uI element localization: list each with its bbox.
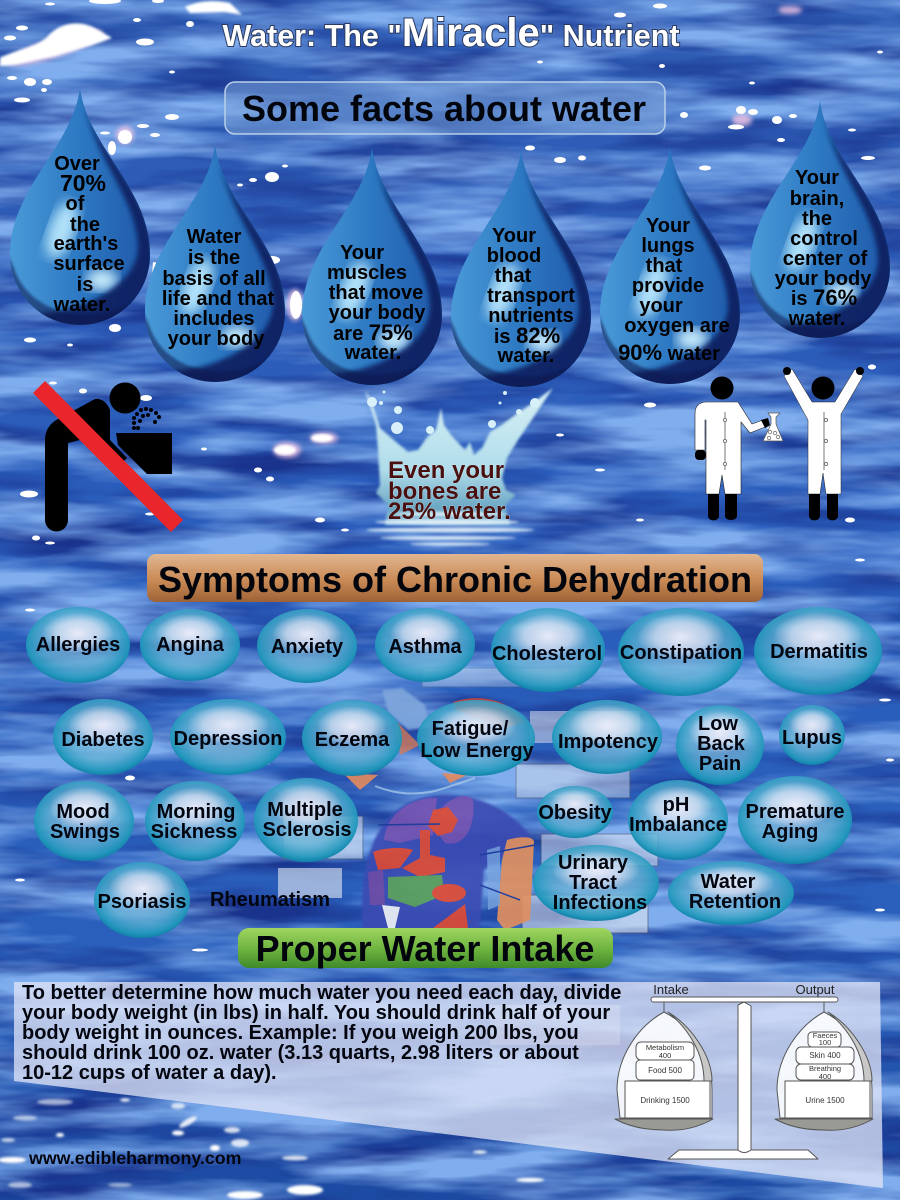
drop: blood 82%: Your	[492, 225, 536, 247]
drop: lungs 90%: provide	[632, 275, 704, 297]
bubble: Fatigue / Low Energy: Low Energy	[420, 740, 535, 762]
drop: 70% of earth's surface: Over	[54, 153, 100, 175]
right pan: output: 400	[819, 1072, 831, 1081]
drop: blood 82%: nutrients	[488, 305, 574, 327]
drop: blood 82%: transport	[487, 285, 575, 307]
bubble: Lupus	[779, 705, 845, 765]
bubble: Obesity	[537, 786, 613, 838]
left pan: intake	[615, 1002, 713, 1130]
bubble: Multiple Sclerosis	[254, 778, 358, 862]
bubble: Obesity: Obesity	[538, 802, 613, 824]
drop: 70% of earth's surface: water.	[53, 294, 110, 316]
bubble: Mood Swings	[34, 781, 134, 861]
bubble: Fatigue / Low Energy: Fatigue/	[432, 718, 509, 740]
bubble: Impotency: Impotency	[558, 731, 659, 753]
drop: lungs 90%	[598, 147, 744, 403]
bubble: pH Imbalance: Imbalance	[629, 814, 727, 836]
scale beam labels	[653, 982, 835, 997]
icon: crossed-out drinking fountain	[39, 382, 177, 532]
splash with bones fact: 25% water.	[388, 498, 511, 525]
left pan: intake: Drinking 1500	[640, 1096, 690, 1105]
drop: 70% of earth's surface: 70%	[60, 170, 106, 196]
drop: brain 76%: control	[790, 228, 858, 250]
bubble: Dermatitis	[754, 607, 882, 695]
bubble: Multiple Sclerosis: Multiple	[267, 799, 343, 821]
icon: scientist with flask	[695, 376, 783, 520]
text block: water intake guidance: body weight in ounces. Example: If you weigh 200 lbs, you	[22, 1022, 579, 1044]
text block: water intake guidance: your body weight (in lbs) in half. You should drink half of your	[22, 1002, 610, 1024]
chart: intake and output balance scale	[615, 982, 873, 1159]
drop: basis of all life: is the	[188, 247, 240, 269]
bubble: Lupus: Lupus	[782, 727, 842, 749]
bubble: Water Retention	[668, 861, 794, 925]
drop: muscles 75%: that move	[329, 282, 423, 304]
drop: basis of all life: includes	[173, 308, 255, 330]
banner: symptoms of chronic dehydration: Symptoms of Chronic Dehydration	[158, 559, 752, 600]
bubble: Premature Aging: Aging	[762, 821, 818, 843]
panel: symptom bubbles	[26, 607, 882, 938]
drop: brain 76%: the	[802, 208, 832, 230]
bubble: Eczema: Eczema	[315, 729, 390, 751]
drop: 70% of earth's surface: of	[66, 193, 85, 215]
drop: brain 76%	[748, 101, 894, 357]
drop: muscles 75%: muscles	[327, 262, 407, 284]
right pan: output: Urine 1500	[805, 1096, 845, 1105]
human body anatomy figure	[343, 688, 535, 950]
bubble: Morning Sickness: Sickness	[151, 821, 237, 843]
drop: muscles 75%	[300, 148, 446, 404]
drop: 70% of earth's surface: surface	[53, 253, 125, 275]
drop: lungs 90%: 90% water	[618, 340, 720, 365]
splash with bones fact: Even your	[388, 457, 504, 484]
right pan: output: Skin 400	[809, 1051, 841, 1060]
bubble: Urinary Tract Infections	[533, 845, 659, 921]
bubble: Low Back Pain: Pain	[699, 753, 741, 775]
bubble: Angina: Angina	[156, 634, 225, 656]
drop: 70% of earth's surface: is	[77, 274, 93, 296]
scale stand	[651, 997, 838, 1159]
bubble: Psoriasis	[94, 862, 190, 938]
drop: brain 76%: water.	[788, 308, 845, 330]
scale beam labels: Output	[795, 982, 835, 997]
drop: blood 82%: that	[495, 265, 532, 287]
bubble: Allergies	[26, 607, 130, 683]
bubble: Fatigue / Low Energy	[417, 700, 535, 776]
banner: proper water intake: Proper Water Intake	[256, 928, 594, 969]
bubble: Impotency	[552, 700, 662, 774]
title: Water: The "Miracle" Nutrient	[222, 11, 680, 55]
drop: lungs 90%: lungs	[641, 235, 695, 257]
bubble: Allergies: Allergies	[36, 634, 120, 656]
website footer: www.edibleharmony.com	[28, 1148, 241, 1168]
drop: muscles 75%: Your	[340, 242, 384, 264]
bubble: Urinary Tract Infections: Tract	[569, 872, 617, 894]
drop: brain 76%: your body	[775, 268, 872, 290]
drop: lungs 90%: that	[646, 255, 683, 277]
drop: lungs 90%: Your	[646, 215, 690, 237]
bubble: Angina	[140, 609, 240, 681]
scale beam labels: Intake	[653, 982, 689, 997]
bubble: Morning Sickness: Morning	[157, 801, 235, 823]
drop: brain 76%: is 76%	[791, 285, 857, 310]
bubble: Anxiety	[257, 609, 357, 683]
bubble: Eczema	[302, 700, 402, 776]
drop: 70% of earth's surface	[8, 88, 154, 344]
bubble: Morning Sickness	[145, 781, 245, 861]
panel: intake background	[14, 982, 883, 1188]
bubble: Mood Swings: Mood	[56, 801, 110, 823]
drop: blood 82%: blood	[487, 245, 541, 267]
bubble: Constipation: Constipation	[620, 642, 742, 664]
drop: basis of all life: your body	[168, 328, 265, 350]
bubble: Depression: Depression	[174, 728, 282, 750]
bubble: Premature Aging: Premature	[746, 801, 844, 823]
drop: basis of all life: Water	[187, 226, 242, 248]
bubble: Asthma: Asthma	[388, 636, 463, 658]
drop: brain 76%: brain,	[790, 188, 844, 210]
bubble: Low Back Pain	[676, 705, 764, 785]
drop: blood 82%	[449, 150, 595, 406]
drop: muscles 75%: your body	[329, 302, 426, 324]
bubble: Urinary Tract Infections: Infections	[553, 892, 647, 914]
drop: muscles 75%: water.	[344, 342, 401, 364]
bubble: Mood Swings: Swings	[50, 821, 120, 843]
bubble: Depression	[170, 699, 286, 775]
text block: water intake guidance	[22, 982, 621, 1084]
left pan: intake: Metabolism	[646, 1043, 684, 1052]
drop: brain 76%: center of	[783, 248, 868, 270]
bubble: Cholesterol: Cholesterol	[492, 643, 602, 665]
drop: basis of all life	[143, 145, 289, 401]
panel: water drop facts	[8, 88, 894, 406]
bubble: pH Imbalance: pH	[663, 794, 689, 816]
bubble: Water Retention: Retention	[689, 891, 781, 913]
right pan: output	[775, 1002, 873, 1130]
drop: blood 82%: is 82%	[494, 323, 560, 348]
drop: muscles 75%: are 75%	[333, 320, 413, 345]
label: Rheumatism: Rheumatism	[210, 889, 330, 911]
drop: blood 82%: water.	[497, 345, 554, 367]
drop: 70% of earth's surface: the	[70, 214, 100, 236]
faint background chart boxes	[190, 668, 658, 933]
drop: basis of all life: basis of all	[162, 268, 266, 290]
bubble: Dermatitis: Dermatitis	[770, 641, 868, 663]
bubble: Multiple Sclerosis: Sclerosis	[263, 819, 351, 841]
bubble: Constipation	[618, 608, 744, 696]
text block: water intake guidance: 10-12 cups of water a day).	[22, 1062, 277, 1084]
drop: 70% of earth's surface: earth's	[54, 233, 118, 255]
bubble: Diabetes	[53, 699, 153, 775]
bubble: Diabetes: Diabetes	[61, 729, 145, 751]
banner: some facts about water: Some facts about water	[242, 88, 646, 129]
drop: lungs 90%: your	[639, 295, 683, 317]
bubble: Premature Aging	[738, 776, 852, 864]
bubble: Asthma	[375, 608, 475, 682]
bubble: Low Back Pain: Low	[698, 713, 738, 735]
left pan: intake: Food 500	[648, 1066, 682, 1075]
right pan: output: 100	[819, 1038, 831, 1047]
text block: water intake guidance: should drink 100 oz. water (3.13 quarts, 2.98 liters or about	[22, 1042, 579, 1064]
bubble: Anxiety: Anxiety	[271, 636, 344, 658]
bubble: Psoriasis: Psoriasis	[98, 891, 186, 913]
bubble: Low Back Pain: Back	[697, 733, 746, 755]
bubble: Cholesterol	[491, 608, 605, 692]
splash with bones fact	[365, 388, 553, 546]
splash with bones fact: bones are	[388, 478, 501, 505]
bubble: Urinary Tract Infections: Urinary	[558, 852, 629, 874]
drop: brain 76%: Your	[795, 167, 839, 189]
drop: lungs 90%: oxygen are	[624, 315, 730, 337]
right pan: output: Breathing	[809, 1064, 841, 1073]
right pan: output: Faeces	[813, 1031, 838, 1040]
bubble: pH Imbalance	[628, 780, 728, 860]
icon: scientist with raised arms	[783, 367, 864, 520]
text block: water intake guidance: To better determine how much water you need each day, divide	[22, 982, 621, 1004]
bubble: Water Retention: Water	[701, 871, 756, 893]
drop: basis of all life: life and that	[162, 288, 274, 310]
left pan: intake: 400	[659, 1051, 671, 1060]
